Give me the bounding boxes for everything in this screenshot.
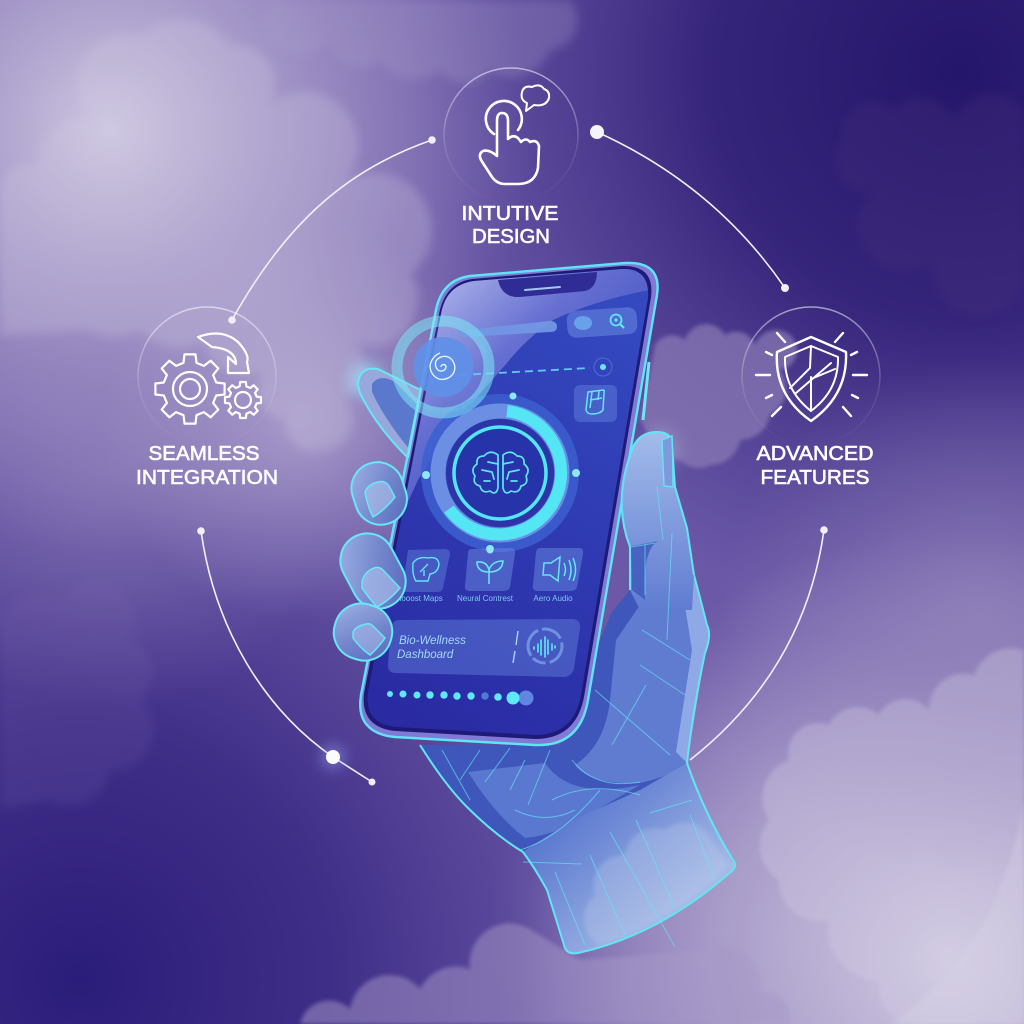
cloud: upper right shadow	[835, 94, 1024, 316]
cloud: behind right icon	[640, 324, 797, 468]
notch	[498, 272, 597, 297]
card captions	[399, 594, 573, 603]
phone inner bezel	[364, 266, 651, 739]
icon ring: seamless integration	[138, 307, 276, 445]
search pill	[457, 321, 557, 337]
crease lines	[442, 630, 715, 947]
label: intuitive design: INTUTIVE	[462, 203, 558, 225]
cloud: lower left shadow	[0, 580, 154, 810]
dashboard card: Bio-Wellness	[399, 635, 466, 647]
label: seamless integration	[136, 443, 278, 489]
phone left edge over finger	[408, 310, 436, 458]
fingerprint button	[397, 321, 489, 413]
pagination dots	[387, 690, 534, 706]
finger two	[345, 455, 414, 531]
dashed connector	[460, 358, 612, 376]
hand outline	[420, 575, 735, 953]
card: maps	[403, 549, 450, 592]
connector arc: bottom right	[690, 526, 828, 760]
translucent cloud on wrist	[584, 822, 728, 945]
cloud: upper left	[0, 19, 432, 452]
hand behind phone	[420, 432, 735, 953]
label: intuitive design	[462, 203, 558, 248]
label: advanced features	[756, 443, 874, 489]
finger three	[331, 524, 415, 618]
icon ring: intuitive design	[444, 68, 578, 202]
label: seamless integration: INTEGRATION	[136, 467, 278, 489]
card captions: Aero Audio	[533, 594, 573, 603]
hand silhouette	[420, 432, 735, 953]
wrist panel	[523, 763, 735, 953]
index finger behind phone	[348, 362, 445, 470]
finger four	[327, 596, 399, 668]
speaker	[525, 287, 560, 290]
right edge light strip	[676, 575, 709, 763]
small chip card	[574, 385, 617, 422]
connector arc: top left	[228, 136, 436, 324]
cloud: bottom center	[300, 923, 790, 1024]
icon: gears with arrow	[155, 333, 261, 424]
card: aero audio	[533, 548, 583, 591]
dashboard card: Dashboard	[397, 649, 454, 661]
card: neural contrast	[465, 546, 515, 591]
phone	[360, 263, 658, 745]
icon ring: advanced features	[742, 307, 880, 445]
thumb over phone edge	[622, 426, 694, 640]
brain progress ring	[421, 392, 580, 553]
cloud: lower right	[760, 648, 1024, 1024]
side button	[643, 362, 649, 420]
phone body	[360, 263, 658, 745]
palm panel	[468, 763, 640, 838]
label: seamless integration: SEAMLESS	[148, 443, 260, 465]
connector arc: bottom left	[197, 527, 376, 786]
icon: shield with rays	[756, 333, 867, 421]
card captions: Neural Contrest	[457, 594, 514, 603]
dashboard card	[388, 619, 580, 677]
screen	[360, 265, 655, 740]
search box	[566, 307, 638, 338]
label: advanced features: FEATURES	[760, 467, 870, 489]
label: intuitive design: DESIGN	[472, 226, 550, 248]
icon: brain	[473, 452, 528, 493]
thenar panel	[575, 600, 707, 783]
cloud: top center	[250, 0, 578, 83]
label: advanced features: ADVANCED	[756, 443, 874, 465]
icon: tapping hand with speech bubble	[480, 85, 549, 184]
card captions: Iooost Maps	[399, 594, 443, 603]
cloud: moon arc	[890, 800, 1024, 1024]
connector arc: top right	[590, 125, 789, 292]
